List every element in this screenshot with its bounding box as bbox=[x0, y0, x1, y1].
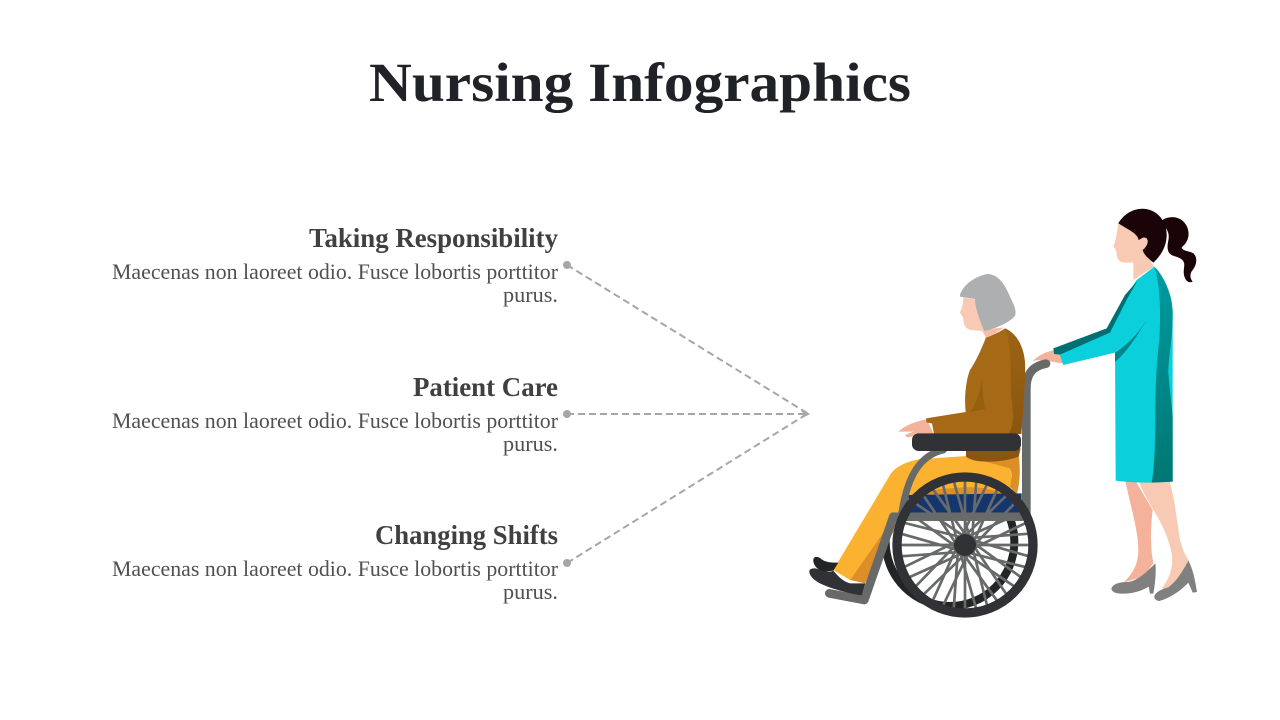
item: Changing Shifts bbox=[112, 520, 559, 604]
nurse legs bbox=[1123, 480, 1189, 590]
nurse sleeve bbox=[1053, 281, 1147, 365]
illustration: nurse pushing patient in wheelchair bbox=[809, 209, 1197, 613]
wheelchair seat cushion bbox=[908, 493, 1022, 513]
text block: Taking Responsibility description: purus. bbox=[503, 282, 558, 307]
patient hair bbox=[960, 274, 1016, 331]
wheel spokes bbox=[900, 480, 1030, 610]
wheelchair frame bbox=[829, 450, 1023, 600]
patient sweater bbox=[926, 328, 1025, 434]
item: Taking Responsibility bbox=[112, 223, 559, 307]
nurse hand bbox=[1033, 350, 1063, 363]
nurse dress back shading bbox=[1152, 267, 1173, 483]
text block: Changing Shifts description bbox=[112, 556, 559, 604]
text block: Patient Care description: Maecenas non laoreet odio. Fusce lobortis porttitor bbox=[112, 408, 559, 433]
heading: Changing Shifts: Changing Shifts bbox=[375, 520, 558, 550]
text block: Changing Shifts description: purus. bbox=[503, 579, 558, 604]
item: Patient Care bbox=[112, 372, 559, 456]
text block: Taking Responsibility description bbox=[112, 259, 559, 307]
patient trousers bbox=[833, 455, 1020, 583]
nurse face and neck bbox=[1113, 224, 1154, 280]
wheelchair front wheel bbox=[897, 477, 1033, 613]
wheel crossbar bbox=[900, 504, 1023, 529]
title: Nursing Infographics bbox=[369, 52, 911, 113]
wheelchair backrest frame bbox=[1026, 364, 1046, 513]
nurse hair and ponytail bbox=[1118, 209, 1196, 282]
text block: Patient Care description: purus. bbox=[503, 431, 558, 456]
patient lower sweater bbox=[966, 448, 1021, 462]
wheelchair rear wheel bbox=[886, 477, 1014, 606]
text block: Changing Shifts description: Maecenas non laoreet odio. Fusce lobortis porttitor bbox=[112, 556, 559, 581]
heading: Taking Responsibility: Taking Responsibility bbox=[309, 223, 558, 253]
patient hand bbox=[898, 419, 934, 438]
patient figure and wheelchair bbox=[809, 274, 1046, 613]
nurse dress bbox=[1108, 267, 1173, 483]
nurse figure bbox=[1033, 209, 1197, 601]
patient sweater shading bbox=[970, 328, 1025, 434]
heading: Patient Care: Patient Care bbox=[413, 372, 558, 402]
wheelchair armrest bbox=[912, 433, 1021, 451]
dashed connector arrows bbox=[563, 261, 808, 567]
wheel rim bbox=[897, 477, 1033, 613]
patient shoes bbox=[809, 557, 865, 595]
wheel hub bbox=[954, 534, 976, 556]
nurse shoes bbox=[1111, 561, 1197, 601]
patient face bbox=[960, 297, 984, 331]
text block: Patient Care description bbox=[112, 408, 559, 456]
patient neck bbox=[982, 327, 1004, 338]
text block: Taking Responsibility description: Maecenas non laoreet odio. Fusce lobortis porttitor bbox=[112, 259, 559, 284]
